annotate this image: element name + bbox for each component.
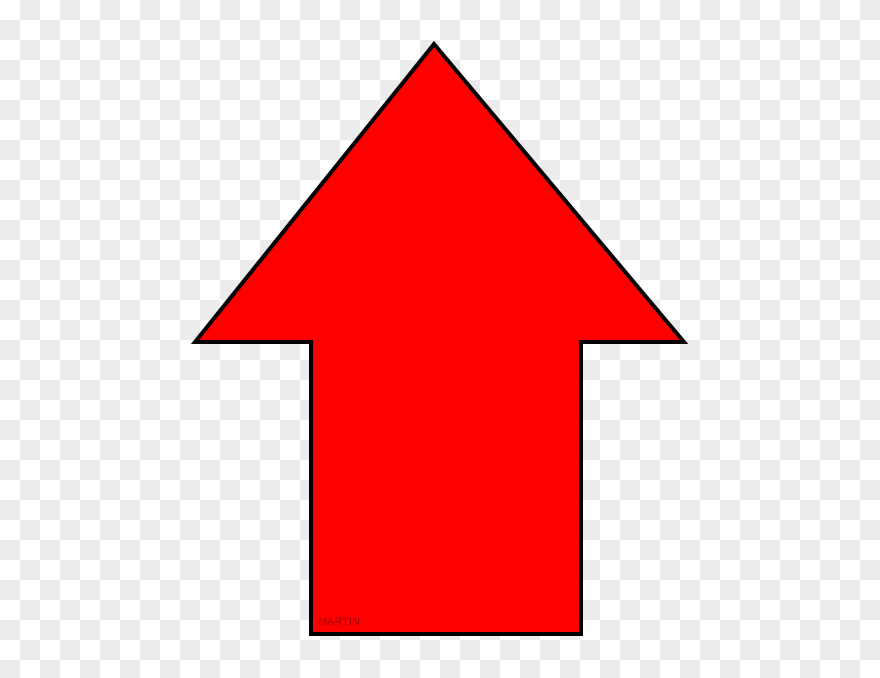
credit text: MARTIN — [318, 616, 360, 628]
